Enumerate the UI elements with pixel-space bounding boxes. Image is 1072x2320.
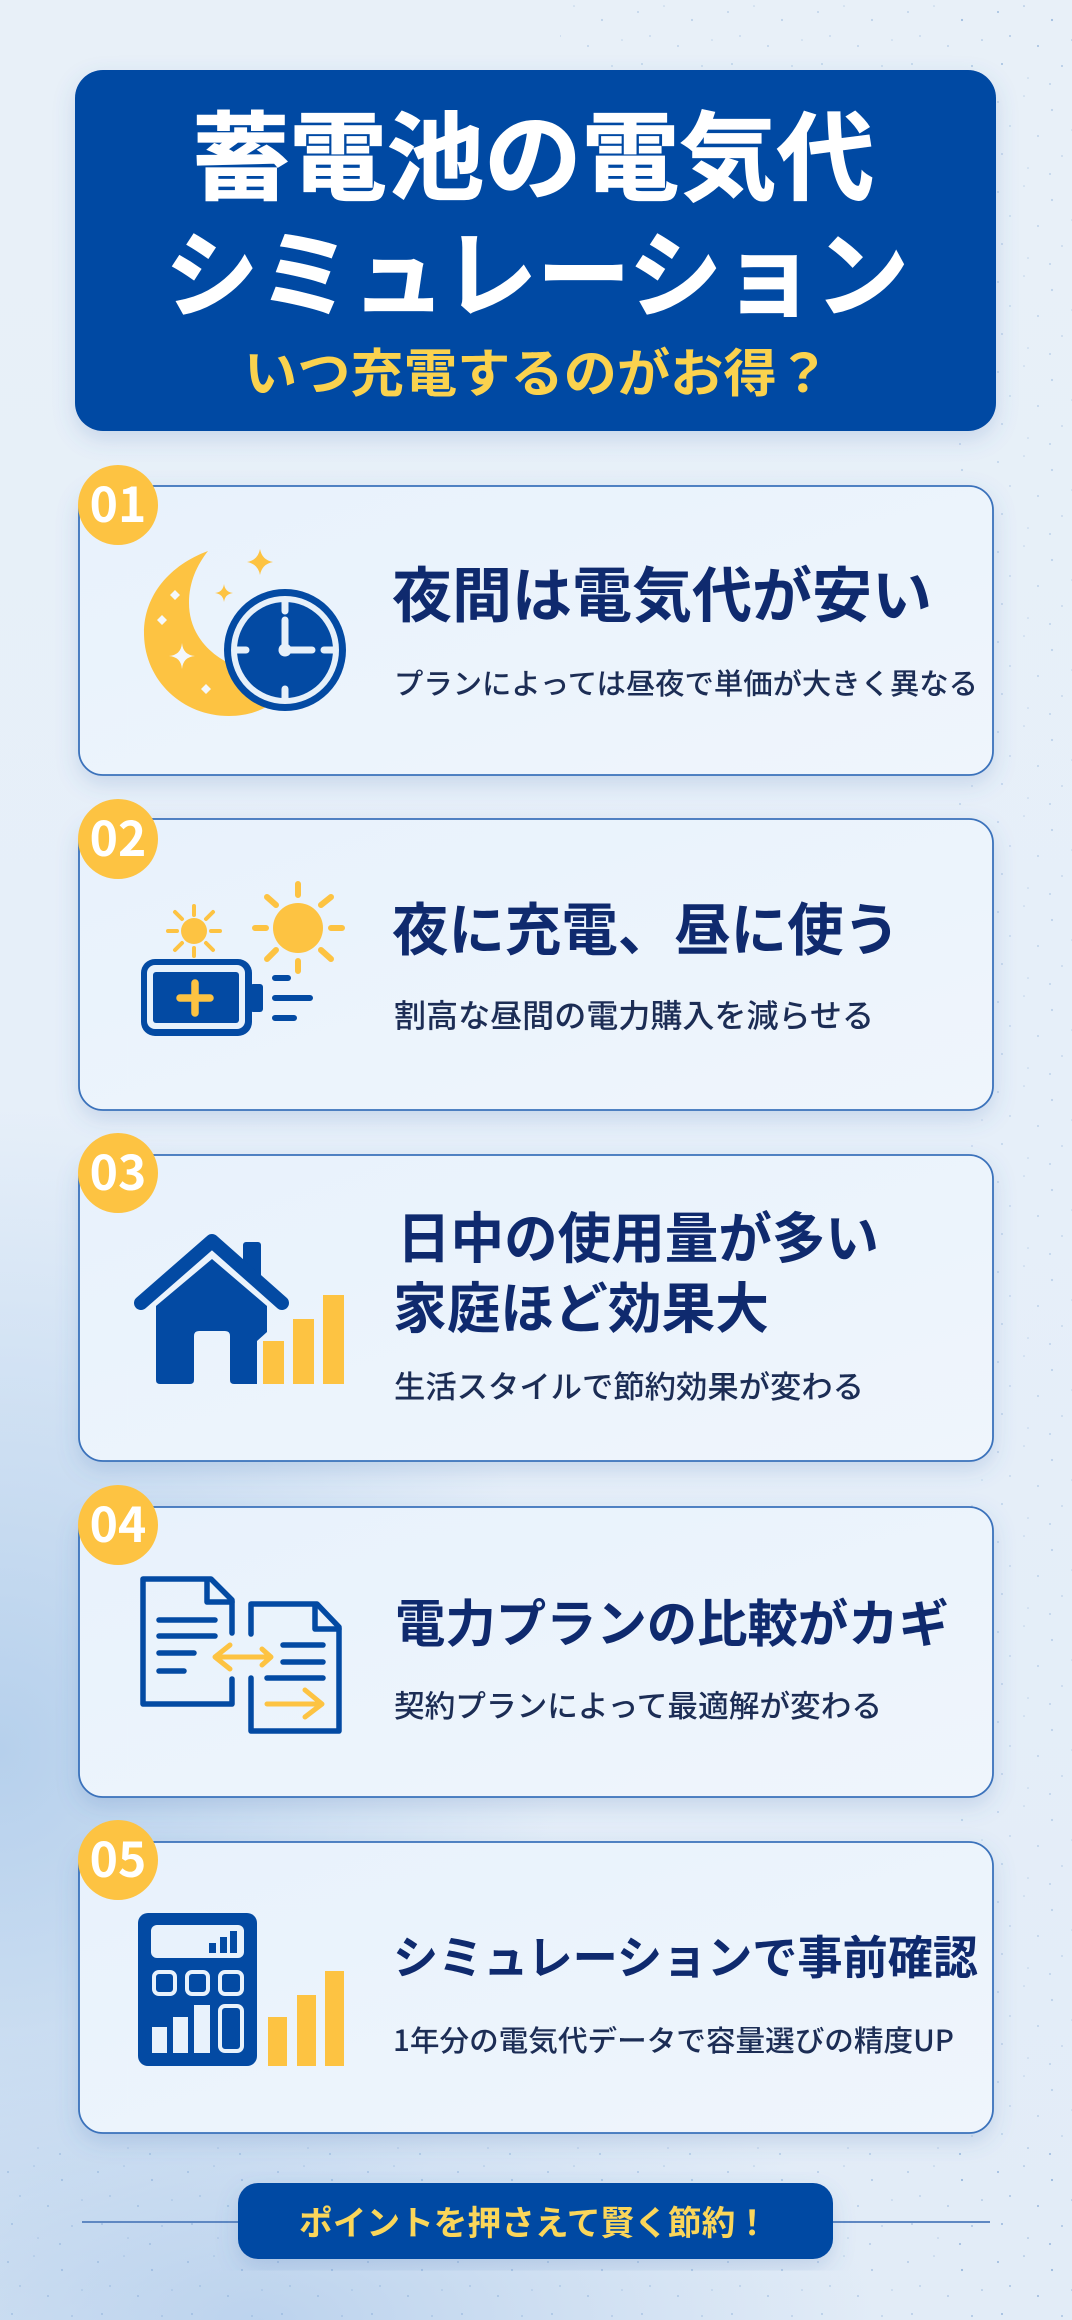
number badge 03: 03 <box>90 1134 146 1204</box>
body 5: 1年分の電気代データで容量選びの精度UP <box>393 2018 954 2060</box>
number badge 01 <box>78 465 158 545</box>
number badge 03 <box>78 1133 158 1213</box>
number badge 04: 04 <box>90 1486 146 1556</box>
icon: battery and suns <box>141 884 342 1036</box>
number badge 05: 05 <box>90 1821 146 1891</box>
icon: calculator and bars <box>138 1913 344 2066</box>
heading 3 line 2: 家庭ほど効果大 <box>393 1278 769 1340</box>
panel: point 2 <box>78 799 993 1110</box>
panel: point 5 <box>78 1820 993 2133</box>
subtitle: いつ充電するのがお得？ <box>244 346 830 404</box>
panel: point 3 <box>78 1133 993 1461</box>
title line 2: シミュレーション <box>165 224 909 330</box>
heading 2: 夜に充電、昼に使う <box>392 899 900 963</box>
footer text: ポイントを押さえて賢く節約！ <box>299 2205 769 2243</box>
number badge 05 <box>78 1820 158 1900</box>
title line 1: 蓄電池の電気代 <box>192 106 874 213</box>
number badge 02 <box>78 799 158 879</box>
number badge 02: 02 <box>90 800 146 870</box>
number badge 04 <box>78 1485 158 1565</box>
icon: house and bars <box>141 1241 344 1384</box>
body 1: プランによっては昼夜で単価が大きく異なる <box>394 668 978 701</box>
number badge 01: 01 <box>90 466 146 536</box>
icon: crescent moon and clock <box>144 549 346 716</box>
heading 1: 夜間は電気代が安い <box>392 563 932 630</box>
panel: point 1 <box>78 465 993 775</box>
panel: point 4 <box>78 1485 993 1797</box>
heading 5: シミュレーションで事前確認 <box>393 1932 978 1984</box>
body 2: 割高な昼間の電力購入を減らせる <box>394 998 874 1034</box>
heading 4: 電力プランの比較がカギ <box>395 1596 949 1653</box>
icon: compare documents <box>143 1579 339 1731</box>
footer banner <box>82 2183 990 2259</box>
heading 3 line 1: 日中の使用量が多い <box>397 1208 879 1270</box>
body 3: 生活スタイルで節約効果が変わる <box>394 1370 864 1405</box>
body 4: 契約プランによって最適解が変わる <box>394 1690 882 1724</box>
title panel <box>75 70 996 431</box>
